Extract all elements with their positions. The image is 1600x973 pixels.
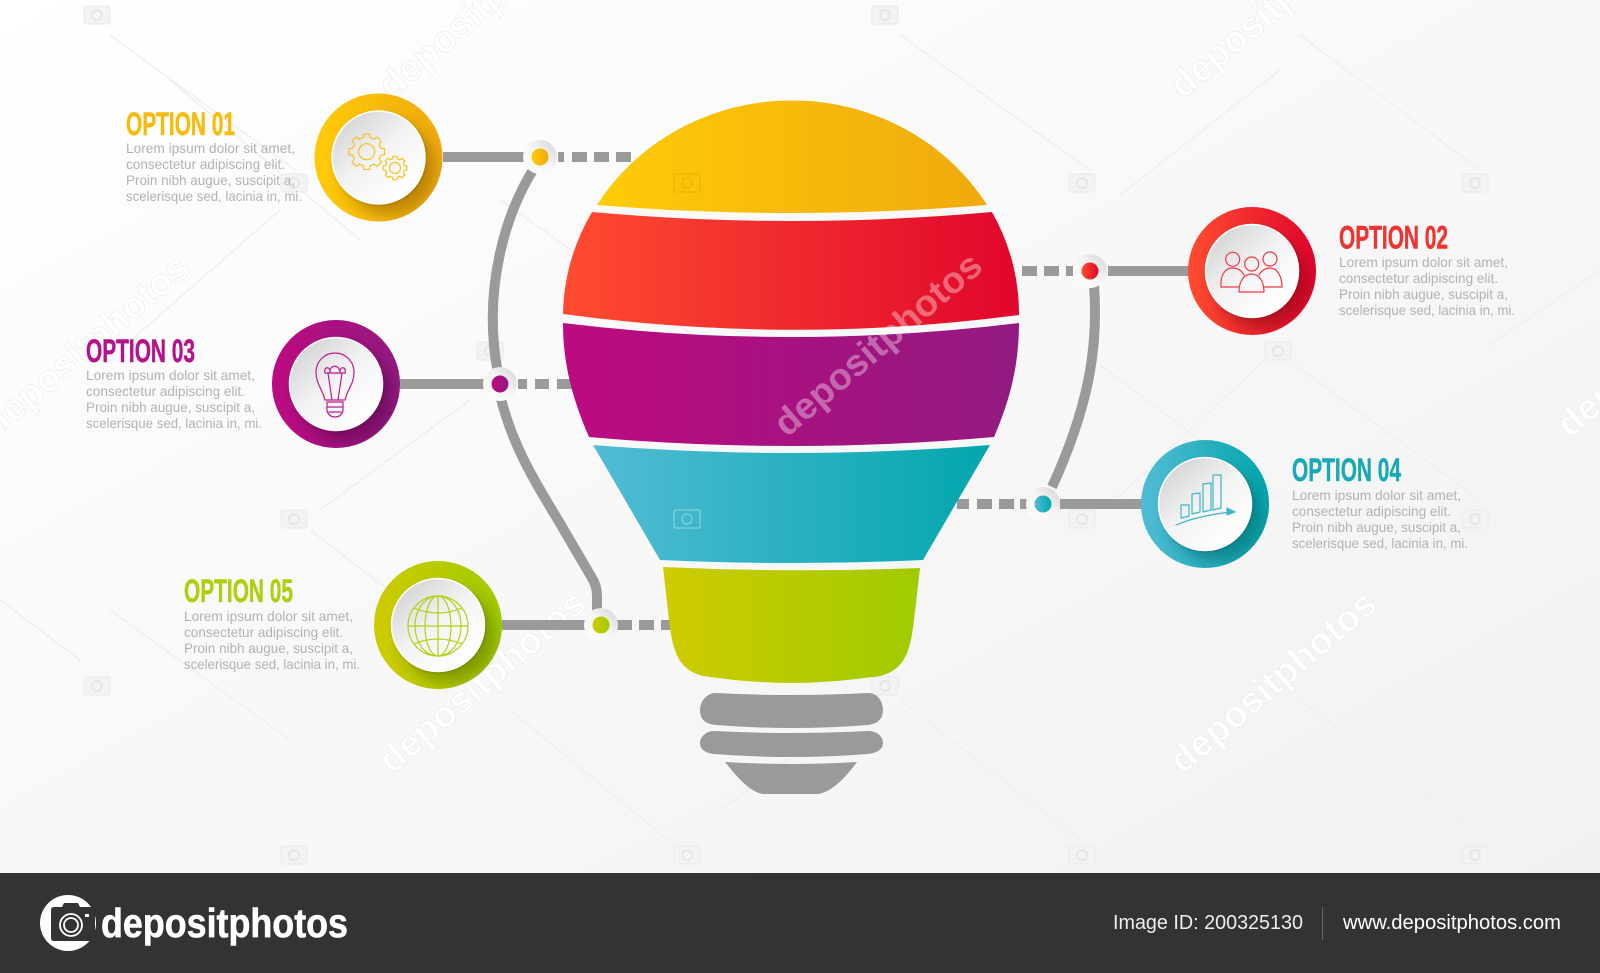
connector: option 3 bbox=[400, 379, 572, 389]
badge: option 02 bbox=[1188, 207, 1316, 335]
heading: option 01: OPTION 01 bbox=[126, 106, 235, 142]
text: option 02: consectetur adipiscing elit. bbox=[1339, 271, 1498, 286]
text: option 05: scelerisque sed, lacinia in, mi. bbox=[184, 657, 360, 672]
connector: option 5 bbox=[502, 620, 674, 630]
heading: option 04: OPTION 04 bbox=[1292, 452, 1401, 488]
panel: option 01 bbox=[126, 94, 442, 222]
icon: light bulb bbox=[316, 353, 354, 417]
website url: www.depositphotos.com bbox=[1342, 912, 1561, 934]
text: option 01 bbox=[126, 141, 302, 204]
footer separator bbox=[1322, 907, 1323, 940]
text: option 05: consectetur adipiscing elit. bbox=[184, 625, 343, 640]
text: option 03: scelerisque sed, lacinia in, mi. bbox=[86, 416, 262, 431]
icon: people bbox=[1221, 252, 1282, 292]
bulb base bbox=[700, 693, 883, 794]
connector: option 2 bbox=[1022, 266, 1190, 276]
panel: option 03 bbox=[86, 320, 400, 448]
heading: option 05: OPTION 05 bbox=[184, 573, 293, 609]
text: option 04: scelerisque sed, lacinia in, mi. bbox=[1292, 536, 1468, 551]
node 1 bbox=[523, 140, 557, 174]
panel: option 04 bbox=[1141, 440, 1468, 568]
icon: globe bbox=[408, 596, 468, 656]
text: option 01: consectetur adipiscing elit. bbox=[126, 157, 285, 172]
node 2 bbox=[1073, 254, 1107, 288]
text: option 04 bbox=[1292, 488, 1468, 551]
node 4 bbox=[1026, 487, 1060, 521]
bulb segment: purple bbox=[563, 323, 1019, 446]
text: option 05 bbox=[184, 609, 360, 672]
text: option 02 bbox=[1339, 255, 1515, 318]
left curve bbox=[493, 170, 597, 612]
text: option 05: Proin nibh augue, suscipit a, bbox=[184, 641, 353, 656]
connector: option 4 bbox=[957, 499, 1143, 509]
text: option 02: Proin nibh augue, suscipit a, bbox=[1339, 287, 1508, 302]
watermark camera on yellow segment bbox=[674, 174, 700, 192]
panel: option 05 bbox=[184, 561, 502, 689]
text: option 03: Proin nibh augue, suscipit a, bbox=[86, 400, 255, 415]
bulb segment: red bbox=[563, 212, 1019, 330]
panel: option 02 bbox=[1188, 207, 1515, 335]
bulb segment: teal bbox=[593, 445, 990, 563]
badge: option 01 bbox=[314, 94, 442, 222]
text: option 01: Lorem ipsum dolor sit amet, bbox=[126, 141, 295, 156]
text: option 05: Lorem ipsum dolor sit amet, bbox=[184, 609, 353, 624]
heading: option 02: OPTION 02 bbox=[1339, 220, 1448, 256]
text: option 04: consectetur adipiscing elit. bbox=[1292, 504, 1451, 519]
watermark camera icons bbox=[84, 6, 1488, 864]
heading: option 03: OPTION 03 bbox=[86, 333, 195, 369]
bulb watermark: depositphotos bbox=[766, 244, 990, 444]
text: option 03: consectetur adipiscing elit. bbox=[86, 384, 245, 399]
watermark camera on teal segment bbox=[674, 510, 700, 528]
text: option 03 bbox=[86, 368, 262, 431]
node 5 bbox=[584, 608, 618, 642]
text: option 01: Proin nibh augue, suscipit a, bbox=[126, 173, 295, 188]
text: option 03: Lorem ipsum dolor sit amet, bbox=[86, 368, 255, 383]
connector: option 1 bbox=[443, 152, 631, 162]
text: option 01: scelerisque sed, lacinia in, mi. bbox=[126, 189, 302, 204]
connector nodes bbox=[483, 140, 1107, 642]
node 3 bbox=[483, 367, 517, 401]
image id: Image ID: 200325130 bbox=[1113, 912, 1303, 934]
bulb segment: green bbox=[663, 567, 920, 683]
text: option 04: Lorem ipsum dolor sit amet, bbox=[1292, 488, 1461, 503]
text: option 02: Lorem ipsum dolor sit amet, bbox=[1339, 255, 1508, 270]
connector lines bbox=[400, 152, 1190, 630]
text: option 02: scelerisque sed, lacinia in, mi. bbox=[1339, 303, 1515, 318]
footer logo wordmark: depositphotos bbox=[101, 900, 348, 946]
light bulb bbox=[563, 100, 1019, 794]
badge: option 03 bbox=[272, 320, 400, 448]
icon: growth chart bbox=[1176, 475, 1235, 525]
background watermark text: depositphotos bbox=[371, 582, 593, 781]
badge: option 04 bbox=[1141, 440, 1269, 568]
badge: option 05 bbox=[374, 561, 502, 689]
bulb segment: yellow bbox=[597, 100, 987, 213]
icon: gears bbox=[349, 134, 407, 180]
right curve bbox=[1052, 285, 1095, 487]
text: option 04: Proin nibh augue, suscipit a, bbox=[1292, 520, 1461, 535]
background watermark text: depositphotos bbox=[1162, 582, 1384, 781]
footer logo icon: camera bbox=[40, 895, 96, 951]
footer bar bbox=[0, 873, 1600, 973]
